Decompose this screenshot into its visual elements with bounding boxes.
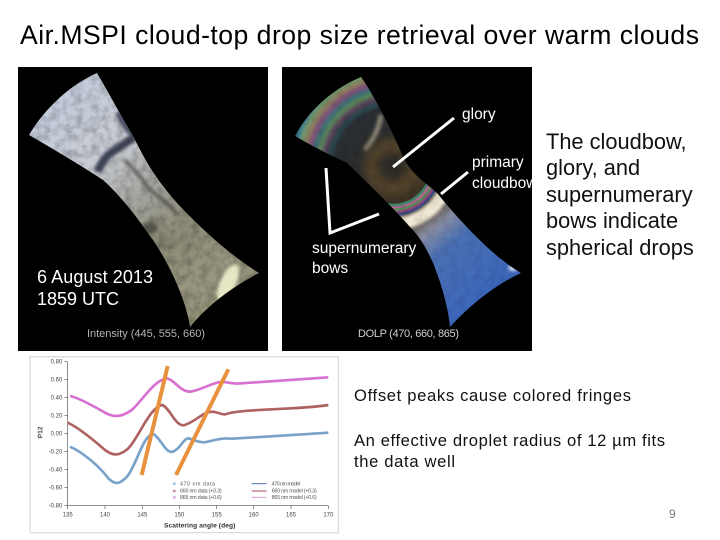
date label: 6 August 2013 [37,267,153,287]
panel: intensity image [18,67,268,351]
x tick labels [63,513,334,519]
legend: 865 nm model (+0.6) [272,495,317,501]
text: effective radius: the data well [354,452,455,471]
y axis title: P12 [37,426,44,438]
label: glory: glory [462,106,496,123]
intensity caption: Intensity (445, 555, 660) [87,328,205,340]
text: offset peaks: Offset peaks cause colored fringes [354,386,631,405]
pointer: cloudbow [441,172,468,194]
x tick labels: 150 [174,513,185,519]
curve: 470 nm [70,433,328,483]
y tick labels [49,360,63,510]
label: primary cloudbow: primary [472,154,524,171]
x tick labels: 155 [212,513,222,519]
y tick labels: 0.40 [51,396,63,402]
x tick labels: 170 [323,513,334,519]
pointer: supernumerary bows [326,168,379,233]
y tick labels: -0.80 [49,504,63,510]
time label: 1859 UTC [37,289,119,309]
y tick labels: -0.60 [49,486,63,492]
y tick labels: 0.00 [51,432,63,438]
y tick labels: -0.40 [49,468,63,474]
legend: 470 nm model [272,481,300,487]
cloud swath: intensity [29,73,259,327]
x tick labels: 140 [100,513,111,519]
pointer: glory [393,118,454,167]
label: primary cloudbow: cloudbow [472,175,538,192]
text block: bows explanation: spherical drops [546,235,694,260]
x tick labels: 135 [63,513,73,519]
y tick labels: 0.60 [51,378,63,384]
x tick labels: 160 [249,513,259,519]
text block: bows explanation: glory, and [546,155,640,180]
label: supernumerary bows: supernumerary [312,240,416,257]
text block: bows explanation: supernumerary [546,182,693,207]
y tick labels: 0.20 [51,414,63,420]
chart: P12 vs scattering angle [30,357,338,533]
curve: 660 nm [68,405,328,454]
curve: 865 nm [70,377,328,416]
page number: 9 [669,507,676,521]
x tick labels: 145 [137,513,148,519]
x tick labels: 165 [286,513,297,519]
y tick labels: 0.80 [51,360,63,366]
polarization swath with bows [295,77,521,327]
legend: 865 nm data (+0.6) [180,495,222,501]
y tick labels: -0.20 [49,450,63,456]
text: effective radius: An effective droplet radius of 12 µm fits [354,431,665,450]
DOLP caption: DOLP (470, 660, 865) [358,328,459,340]
legend: 660 nm data (+0.3) [180,489,222,495]
legend: 660 nm model (+0.3) [272,489,317,495]
legend: 470 nm data [180,481,215,487]
text block: bows explanation: The cloudbow, [546,129,687,154]
text block: bows explanation: bows indicate [546,208,678,233]
annotation: orange line 1 [142,366,168,475]
legend [173,481,317,501]
label: supernumerary bows: bows [312,260,348,277]
title: Air.MSPI cloud-top drop size retrieval over warm clouds [20,20,699,50]
x axis title: Scattering angle (deg) [164,523,235,530]
panel: DOLP image [282,67,538,351]
annotation: orange line 2 [176,369,228,475]
axes [64,362,328,509]
